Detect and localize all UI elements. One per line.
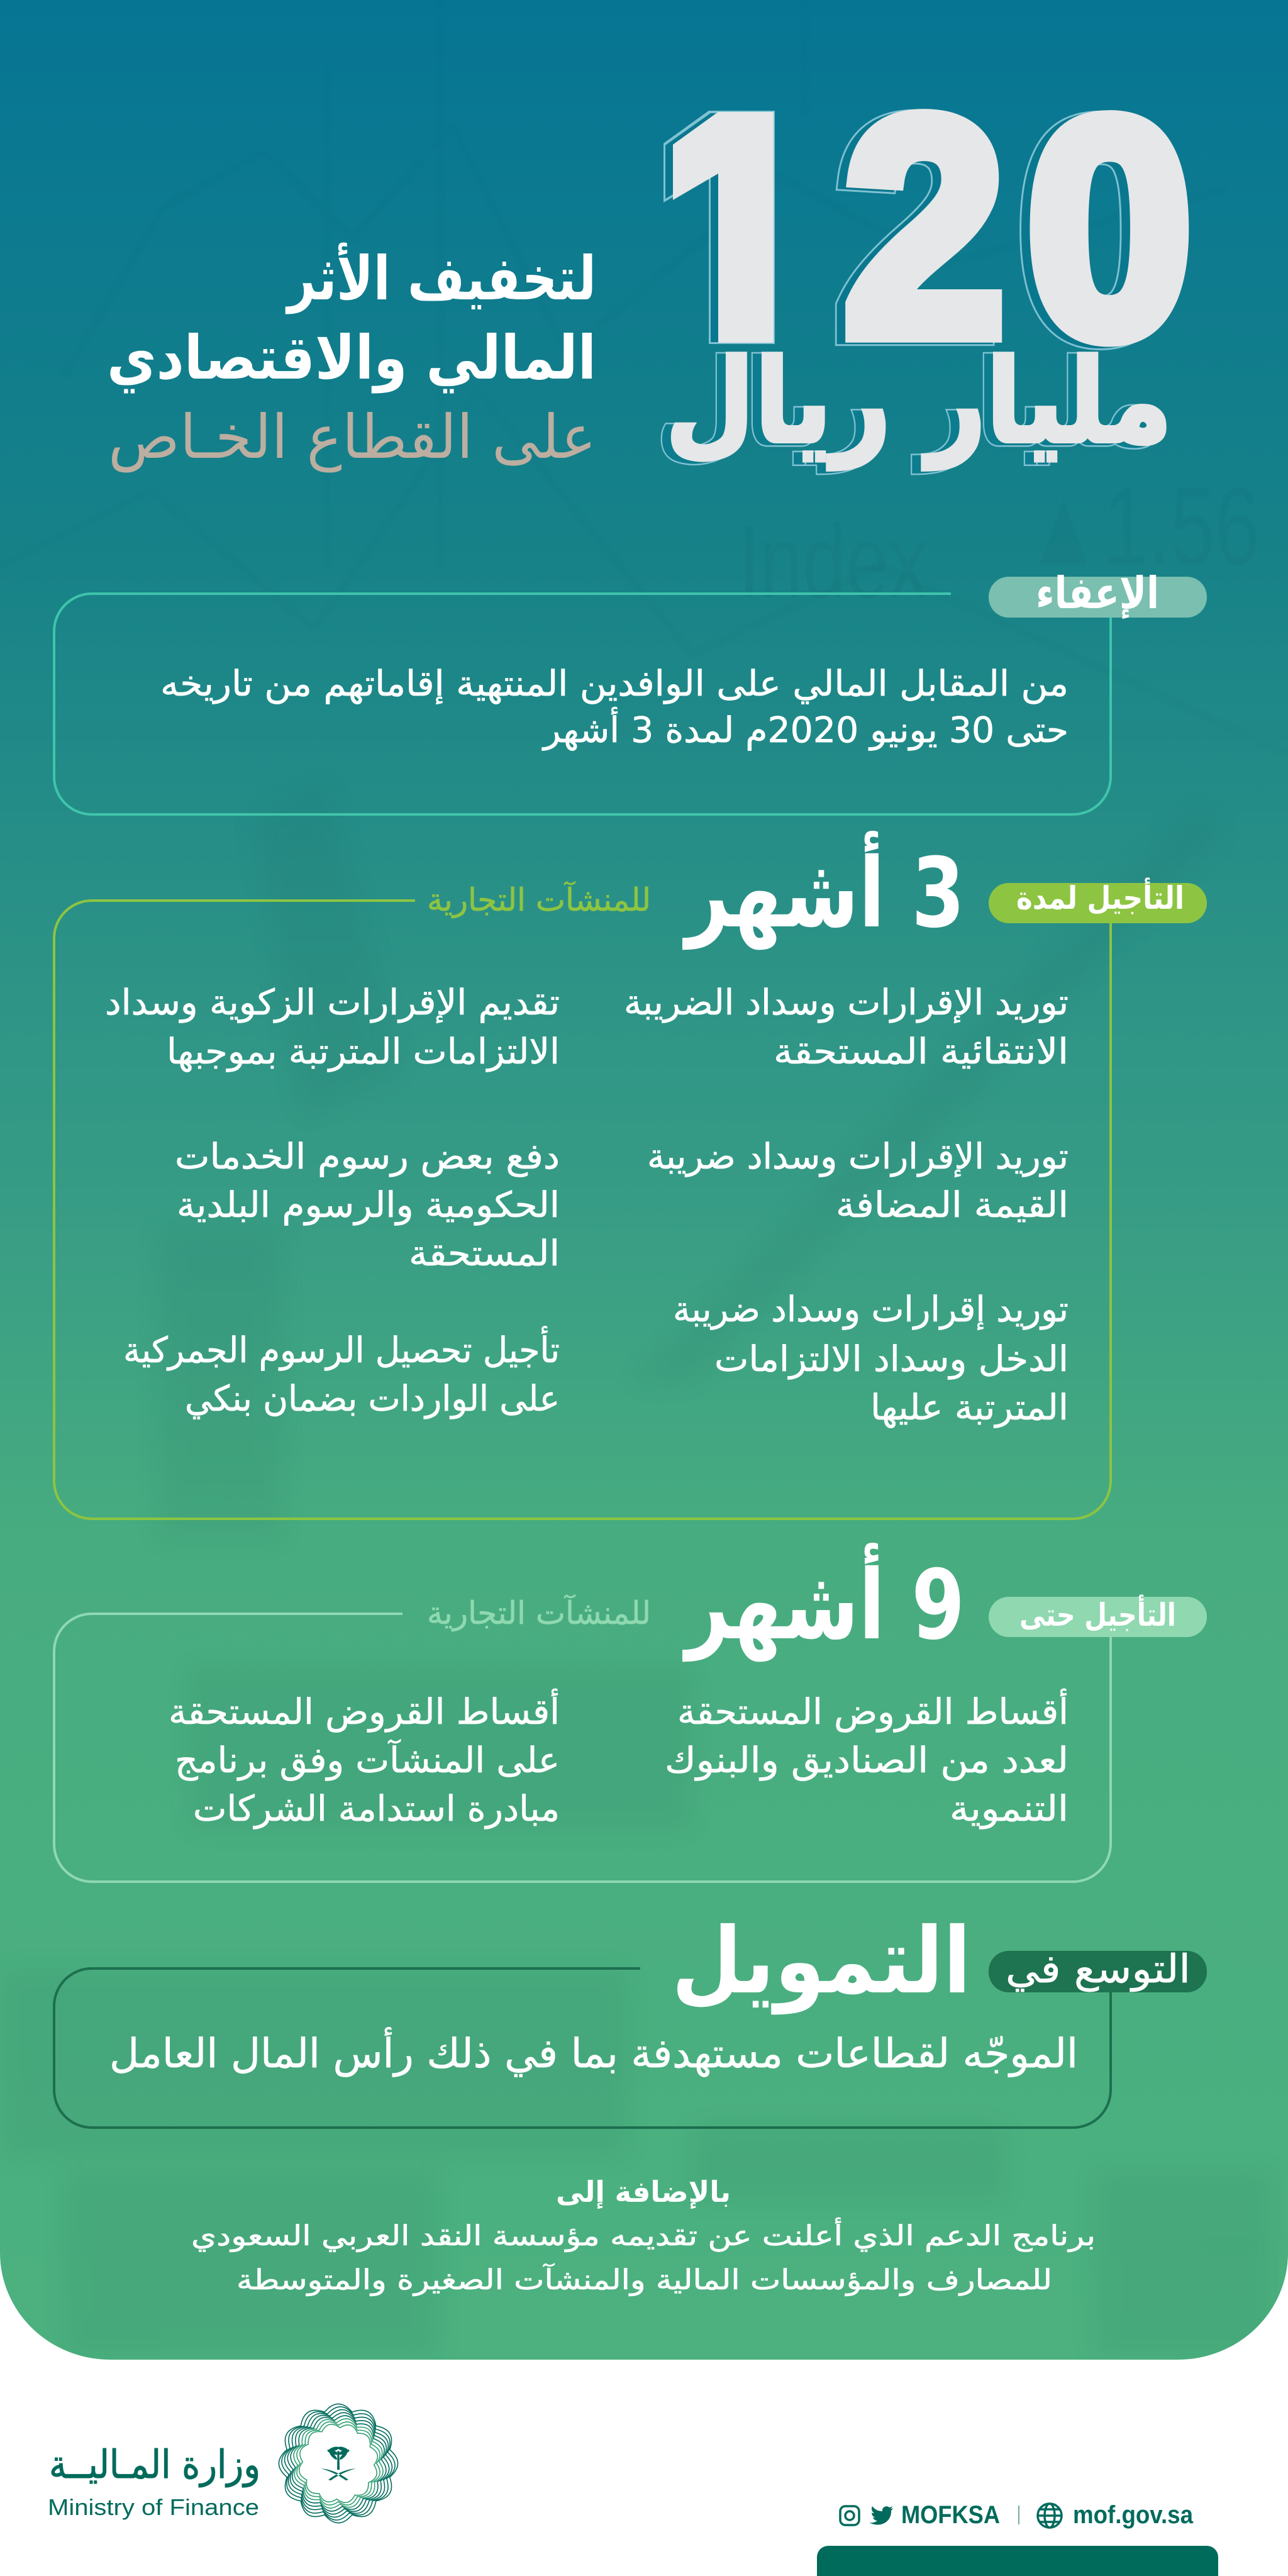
panel: exemption: [54, 567, 1207, 814]
right column items: توريد الإقرارات وسداد ضريبة: [647, 1136, 1069, 1177]
exemption body text: من المقابل المالي على الوافدين المنتهية إقاماتهم من تاريخه: [160, 663, 1069, 705]
closing note line 1: برنامج الدعم الذي أعلنت عن تقديمه مؤسسة النقد العربي السعودي: [191, 2218, 1096, 2252]
subtitle line 1: لتخفيف الأثر: [286, 242, 596, 314]
icon: instagram: [840, 2506, 859, 2525]
right column items: التنموية: [950, 1789, 1069, 1829]
digit 2: 2: [844, 55, 1005, 399]
right column items: [624, 982, 1069, 1428]
heading: 9 months: 9 أشهر: [682, 1543, 965, 1662]
panel frame: [54, 901, 1111, 1519]
subtitle line 3: على القطاع الخـاص: [108, 402, 596, 473]
ministry name arabic: وزارة المـاليــة: [49, 2441, 260, 2487]
digit 0: 0: [1027, 55, 1192, 400]
left column items: تقديم الإقرارات الزكوية وسداد: [105, 982, 560, 1023]
left column items: تأجيل تحصيل الرسوم الجمركية: [123, 1326, 560, 1371]
digit 2 outline: 2: [835, 57, 996, 401]
financing body text: الموجّه لقطاعات مستهدفة بما في ذلك رأس المال العامل: [109, 2027, 1078, 2077]
unit outline inner: مليار ريال: [657, 336, 1163, 472]
tag pill: التوسع في: [1006, 1946, 1191, 1992]
ministry name english: Ministry of Finance: [48, 2494, 259, 2520]
left column items: [105, 982, 560, 1419]
panel: deferral for 3 months: [54, 831, 1207, 1519]
left column items: على الواردات بضمان بنكي: [185, 1379, 560, 1419]
right column items: توريد الإقرارات وسداد الضريبة: [624, 982, 1069, 1023]
divider: [1018, 2506, 1019, 2524]
exemption body text: حتى 30 يونيو 2020م لمدة 3 أشهر: [541, 707, 1069, 751]
subtitle: [107, 242, 596, 473]
left column items: على المنشآت وفق برنامج: [175, 1739, 560, 1781]
unit outline: مليار ريال: [657, 336, 1163, 472]
right column items: الانتقائية المستحقة: [774, 1031, 1069, 1072]
digit 2 outline inner: 2: [835, 57, 996, 401]
website: mof.gov.sa: [1073, 2501, 1194, 2529]
icon: wavy emblem: [279, 2404, 398, 2523]
left column items: الحكومية والرسوم البلدية: [177, 1185, 560, 1226]
label: for commercial establishments: للمنشآت التجارية: [427, 1594, 651, 1631]
closing note heading: بالإضافة إلى: [556, 2175, 731, 2209]
closing note line 2: للمصارف والمؤسسات المالية والمنشآت الصغيرة والمتوسطة: [236, 2263, 1052, 2296]
left column items: دفع بعض رسوم الخدمات: [175, 1136, 560, 1177]
social links: [840, 2501, 1194, 2529]
left column items: الالتزامات المترتبة بموجبها: [167, 1031, 560, 1072]
left column items: [169, 1689, 560, 1829]
digit 0 outline: 0: [1018, 57, 1184, 402]
label: for commercial establishments: للمنشآت التجارية: [427, 881, 651, 918]
panel: deferral up to 9 months: [54, 1543, 1207, 1882]
right column items: القيمة المضافة: [836, 1185, 1069, 1226]
heading: financing: التمويل: [672, 1908, 971, 2014]
exemption body text: [160, 663, 1069, 751]
tag pill: exemption: [989, 567, 1207, 619]
bottom bar: [817, 2546, 1218, 2576]
left column items: المستحقة: [409, 1233, 560, 1274]
right column items: المترتبة عليها: [870, 1387, 1069, 1428]
tag pill: التأجيل لمدة: [1016, 877, 1184, 916]
subtitle line 2: المالي والاقتصادي: [107, 323, 596, 394]
headline number 120: [629, 0, 1192, 439]
panel frame: [54, 594, 1111, 814]
handle: MOFKSA: [901, 2501, 1000, 2529]
right column items: لعدد من الصناديق والبنوك: [665, 1740, 1069, 1781]
panel frame: [54, 1614, 1111, 1882]
closing note: [191, 2175, 1096, 2296]
tag pill: [989, 877, 1207, 923]
tag pill: exemption: الإعفاء: [1036, 567, 1159, 619]
ministry logo: [48, 2404, 398, 2523]
left column items: مبادرة استدامة الشركات: [193, 1789, 560, 1829]
left column items: أقساط القروض المستحقة: [169, 1689, 560, 1733]
right column items: أقساط القروض المستحقة: [677, 1689, 1069, 1733]
digit 0 outline inner: 0: [1018, 57, 1184, 402]
tag pill: التأجيل حتى: [1019, 1594, 1176, 1633]
icon: globe: [1038, 2504, 1062, 2528]
panel: expansion in financing: [54, 1908, 1207, 2128]
icon: palm and swords: [321, 2446, 356, 2480]
right column items: الدخل وسداد الالتزامات: [714, 1339, 1069, 1380]
icon: twitter: [869, 2506, 893, 2525]
unit text: مليار ريال: [665, 335, 1172, 470]
headline unit: billion riyals: [657, 335, 1172, 472]
background chart label: Index: Index: [738, 504, 928, 619]
right column items: [665, 1689, 1069, 1829]
panel frame: [54, 1968, 1111, 2128]
right column items: توريد إقرارات وسداد ضريبة: [673, 1289, 1069, 1331]
heading: 3 months: 3 أشهر: [682, 831, 965, 950]
